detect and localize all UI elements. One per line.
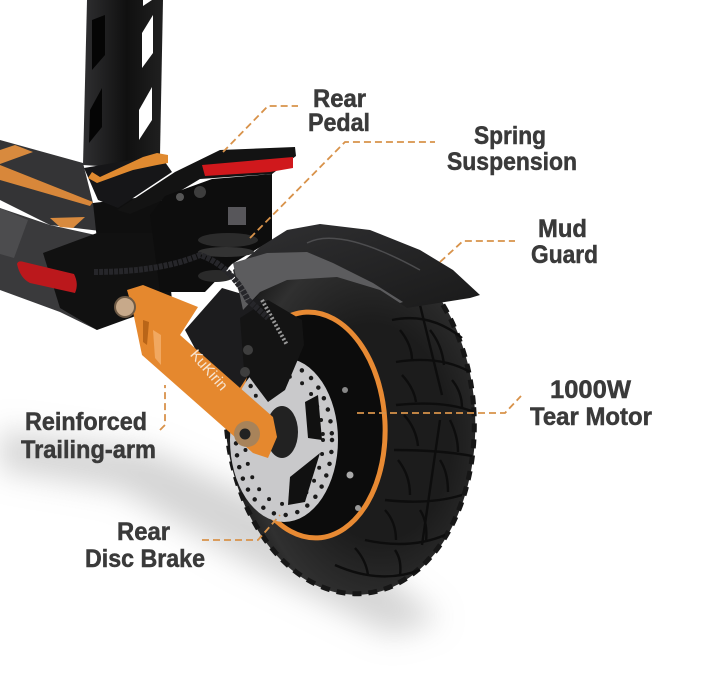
rear disc brake (230, 358, 338, 522)
mud guard (233, 224, 480, 310)
brake lever (88, 153, 168, 183)
leader: spring suspension (250, 142, 435, 238)
reinforced trailing arm (115, 285, 277, 458)
brake caliper (240, 300, 304, 402)
label: rear pedal: Pedal (308, 109, 370, 137)
orange rim and motor hub (233, 308, 391, 542)
label: disc brake: Rear (117, 518, 170, 546)
suspension and bracket (150, 174, 272, 292)
leader: rear pedal (223, 106, 298, 152)
leader: disc brake (202, 515, 280, 540)
rear pedal with tail light (117, 147, 296, 214)
label: motor: 1000W (550, 376, 631, 404)
label: disc brake: Disc Brake (85, 545, 205, 573)
ground shadow (0, 430, 440, 635)
label: mud guard: Guard (531, 241, 598, 269)
scooter deck (0, 140, 172, 330)
label: spring suspension: Spring (474, 122, 546, 150)
label: trailing arm: Reinforced (25, 408, 147, 436)
label: trailing arm (21, 408, 156, 464)
label: motor: Tear Motor (530, 403, 652, 431)
label: spring suspension (447, 122, 577, 176)
label: mud guard: Mud (538, 215, 587, 243)
label: trailing arm: Trailing-arm (21, 436, 156, 464)
label: mud guard (531, 215, 598, 269)
label: rear pedal (308, 85, 370, 137)
tire (213, 229, 487, 603)
label: disc brake (85, 518, 205, 573)
label: spring suspension: Suspension (447, 148, 577, 176)
rear bracket under stem (84, 155, 172, 208)
leader: trailing arm (160, 385, 165, 430)
trailing arm bracket (185, 288, 262, 400)
scooter stem (83, 0, 163, 168)
brake cable (94, 255, 268, 318)
label: motor (530, 376, 652, 431)
rear deck light (17, 261, 77, 293)
leader: motor (357, 396, 521, 413)
reinforced trailing arm: KuKirin (186, 347, 231, 394)
leader: mud guard (440, 241, 515, 262)
label: rear pedal: Rear (313, 85, 366, 113)
